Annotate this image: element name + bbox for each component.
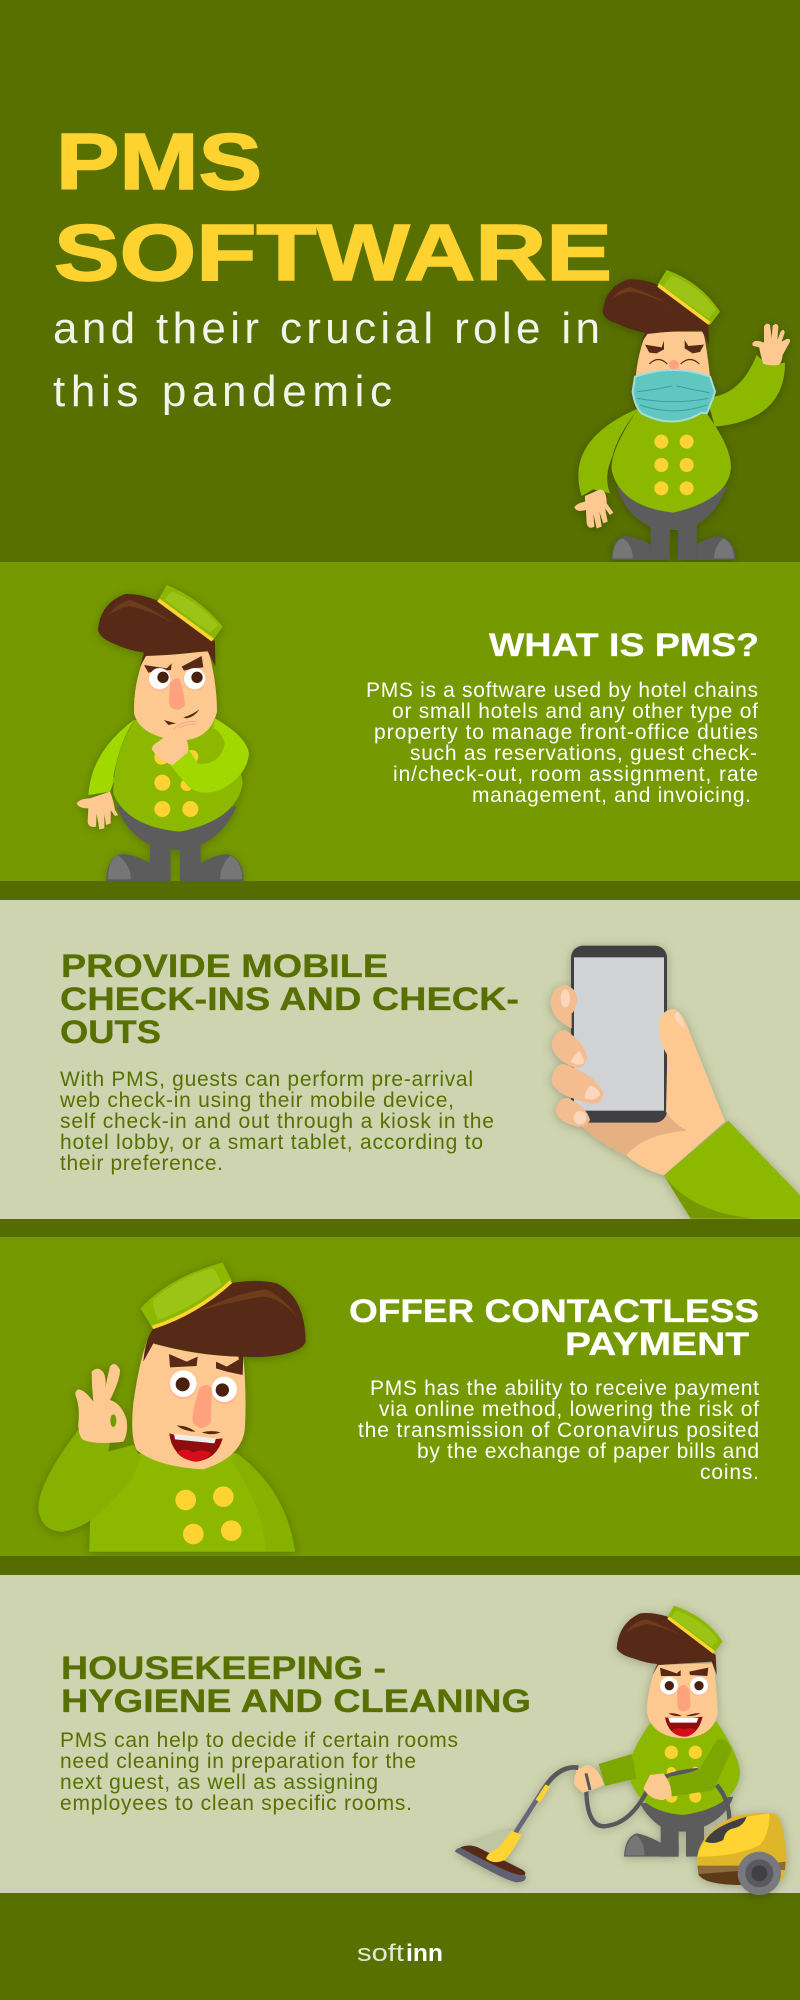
panel: housekeeping (0, 1575, 800, 1895)
subtitle: this pandemic (53, 367, 392, 416)
eyebrows (144, 656, 203, 673)
body text: PMS can help to decide if certain rooms (60, 1729, 458, 1752)
sleeve (664, 1121, 800, 1219)
arm (38, 1430, 140, 1532)
hair (143, 1281, 306, 1375)
open mouth (169, 1433, 223, 1462)
body text: next guest, as well as assigning (60, 1771, 378, 1794)
body text (358, 1377, 759, 1484)
mouth (164, 709, 199, 729)
body text: via online method, lowering the risk of (379, 1398, 759, 1421)
hose over hand (586, 1773, 590, 1790)
fingernails (561, 989, 600, 1124)
face mask (633, 370, 715, 422)
body text: their preference. (60, 1152, 223, 1175)
subtitle: and their crucial role in (53, 304, 600, 353)
hands (574, 1765, 672, 1800)
trousers (117, 807, 237, 881)
moustache (668, 1713, 701, 1716)
title: SOFTWARE (54, 208, 612, 297)
heading (349, 1293, 759, 1362)
hanging hand (574, 489, 613, 528)
body text: coins. (700, 1461, 759, 1484)
body text: PMS has the ability to receive payment (370, 1377, 759, 1400)
hanging arm (578, 408, 638, 496)
illustration: bellhop vacuuming (455, 1606, 787, 1895)
panel: footer (0, 1893, 800, 2000)
vacuum body (697, 1813, 787, 1885)
hanging arm (88, 719, 135, 795)
panel: contactless payment (0, 1237, 800, 1556)
body text: need cleaning in preparation for the (60, 1750, 416, 1773)
vacuum wand (515, 1767, 578, 1833)
thumbnail (674, 1012, 686, 1028)
hand on chin (152, 728, 188, 765)
open mouth (665, 1717, 703, 1737)
jacket (89, 1453, 295, 1552)
face (134, 652, 217, 741)
title: PMS (56, 117, 262, 206)
logo: softinn: soft (357, 1940, 404, 1967)
cap (667, 1606, 723, 1653)
raised arm (707, 355, 785, 427)
logo: softinn (357, 1940, 443, 1967)
face (647, 1663, 718, 1738)
title (54, 117, 612, 297)
right sleeve (669, 1739, 732, 1797)
heading: HOUSEKEEPING - (61, 1650, 386, 1686)
heading: OFFER CONTACTLESS (349, 1293, 759, 1329)
face (132, 1342, 246, 1469)
hair (617, 1613, 717, 1675)
body text: management, and invoicing. (472, 784, 751, 807)
heading: OUTS (60, 1014, 161, 1050)
phone screen (574, 957, 664, 1111)
heading (60, 948, 519, 1050)
trousers (640, 1797, 733, 1857)
body text: by the exchange of paper bills and (417, 1440, 759, 1463)
body text (60, 1729, 458, 1815)
OK hand (75, 1364, 127, 1443)
eyebrows (169, 1354, 243, 1375)
phone (571, 946, 667, 1123)
hair (603, 279, 709, 345)
eyebrows (660, 1668, 708, 1676)
cap (158, 585, 223, 641)
shoes (106, 854, 244, 881)
divider band (0, 881, 800, 900)
heading (61, 1650, 531, 1719)
moustache (177, 1426, 221, 1434)
subtitle (53, 304, 600, 416)
left sleeve (599, 1754, 637, 1786)
heading: CHECK-INS AND CHECK- (60, 981, 519, 1017)
cap (141, 1263, 232, 1328)
logo: softinn: inn (406, 1940, 443, 1967)
heading: PAYMENT (565, 1326, 750, 1362)
body text (59, 1068, 494, 1175)
jacket (113, 720, 243, 832)
divider band (0, 1556, 800, 1575)
panel: header (0, 0, 800, 562)
jacket buttons (154, 750, 198, 817)
nose (192, 1385, 212, 1428)
heading: WHAT IS PMS? (489, 627, 759, 663)
jacket fold (230, 1453, 295, 1552)
thumb and wrist (626, 1009, 725, 1175)
body text: such as reservations, guest check- (410, 742, 757, 765)
hanging hand (77, 792, 118, 829)
fingers (551, 985, 603, 1127)
jacket buttons (175, 1486, 242, 1544)
jacket buttons (654, 435, 694, 495)
body text (366, 679, 758, 807)
sleeve fold (664, 1175, 753, 1219)
panel: what is PMS (0, 562, 800, 881)
cap (657, 270, 720, 325)
suction cone (460, 1830, 517, 1860)
illustration: bellhop waving with mask (574, 270, 790, 560)
illustration: thinking bellhop (77, 585, 249, 881)
closed eyes and brows (645, 340, 704, 364)
nose (669, 360, 679, 370)
body text: employees to clean specific rooms. (60, 1792, 412, 1815)
divider band (0, 1219, 800, 1237)
folded arm (170, 718, 249, 793)
body text: PMS is a software used by hotel chains (366, 679, 758, 702)
panel: mobile check-ins (0, 900, 800, 1219)
heading: PROVIDE MOBILE (61, 948, 388, 984)
palm (580, 1110, 687, 1156)
jacket (628, 1722, 740, 1815)
body text: in/check-out, room assignment, rate (393, 763, 758, 786)
eyes (149, 668, 206, 691)
shoe (624, 1833, 679, 1857)
body text: the transmission of Coronavirus posited (358, 1419, 759, 1442)
nose (169, 678, 185, 710)
body text: With PMS, guests can perform pre-arrival (60, 1068, 473, 1091)
vacuum nozzle (455, 1831, 526, 1882)
body text: or small hotels and any other type of (392, 700, 758, 723)
illustration: bellhop giving OK sign (38, 1263, 306, 1552)
body text: property to manage front-office duties (374, 721, 758, 744)
vacuum wheel (738, 1852, 781, 1895)
nose (677, 1685, 691, 1712)
eyes (660, 1677, 708, 1696)
body text: self check-in and out through a kiosk in the (60, 1110, 494, 1133)
body text: web check-in using their mobile device, (59, 1089, 454, 1112)
waving hand (752, 324, 790, 365)
hair (98, 594, 215, 667)
illustration: hand holding phone (551, 946, 800, 1219)
jacket buttons (665, 1746, 702, 1803)
shoes (612, 536, 736, 560)
jacket (612, 408, 731, 513)
eyes (170, 1370, 237, 1404)
heading: HYGIENE AND CLEANING (61, 1683, 531, 1719)
vacuum hose (586, 1770, 729, 1826)
body text: hotel lobby, or a smart tablet, according to (60, 1131, 483, 1154)
trousers (617, 487, 727, 560)
face (635, 332, 712, 410)
